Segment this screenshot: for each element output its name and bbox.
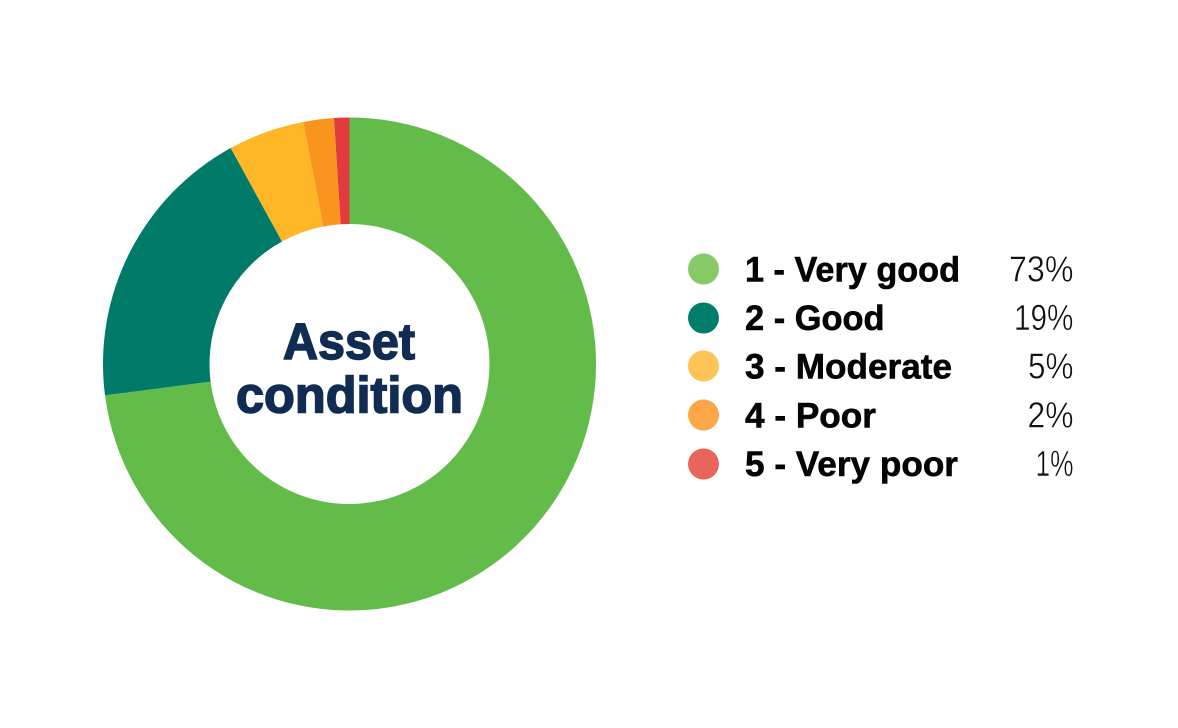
legend row: 5 - Very poor: 1% bbox=[1036, 443, 1074, 484]
center title: Asset bbox=[283, 313, 415, 370]
center title: condition bbox=[236, 366, 463, 424]
donut chart: asset condition bbox=[103, 117, 596, 610]
legend row: 1 - Very good: 73% bbox=[1009, 249, 1074, 290]
legend row: 3 - Moderate bbox=[688, 346, 1074, 387]
legend bbox=[688, 249, 1074, 484]
legend row: 4 - Poor: 2% bbox=[1028, 395, 1074, 436]
legend row: 2 - Good: 2 - Good bbox=[745, 299, 884, 338]
legend row: 3 - Moderate: 5% bbox=[1028, 346, 1074, 387]
legend row: 5 - Very poor bbox=[688, 443, 1074, 484]
segment: 4 - Poor 2% bbox=[303, 118, 341, 226]
legend row: 4 - Poor: 4 - Poor bbox=[745, 397, 876, 436]
segment: 2 - Good 19% bbox=[103, 148, 282, 395]
legend row: 5 - Very poor: 5 - Very poor bbox=[745, 445, 958, 484]
legend row: 4 - Poor bbox=[688, 395, 1074, 436]
legend row: 2 - Good: 19% bbox=[1014, 297, 1074, 338]
segment: 5 - Very poor 1% bbox=[334, 118, 350, 224]
segment: 1 - Very good 73% bbox=[105, 117, 596, 610]
legend row: 1 - Very good: 1 - Very good bbox=[745, 251, 960, 290]
legend row: 3 - Moderate: 3 - Moderate bbox=[745, 348, 952, 387]
segment: 3 - Moderate 5% bbox=[231, 122, 323, 242]
legend row: 1 - Very good bbox=[688, 249, 1074, 290]
legend row: 2 - Good bbox=[688, 297, 1074, 338]
center title bbox=[236, 313, 463, 424]
